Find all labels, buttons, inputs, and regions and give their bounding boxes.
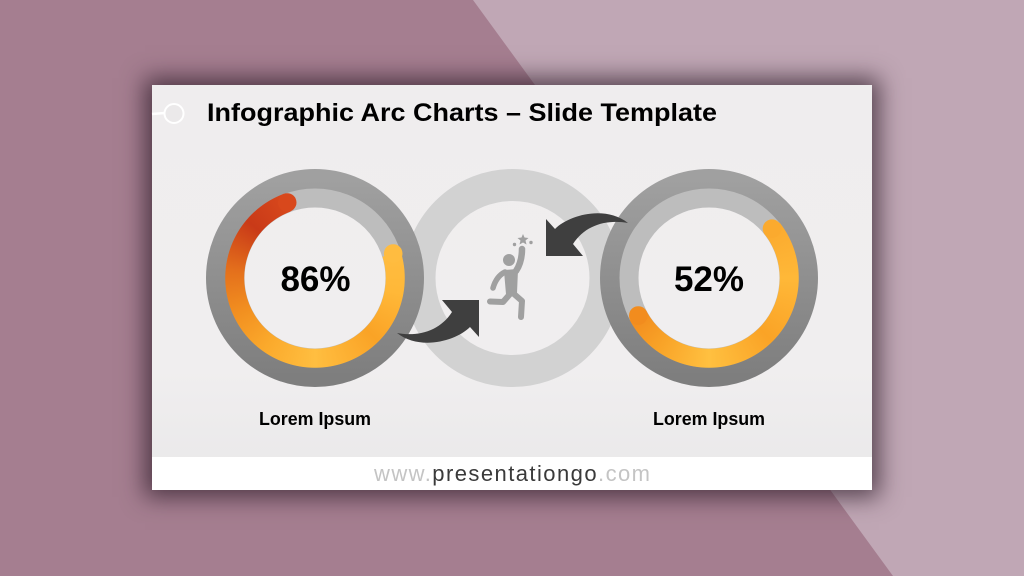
right gauge arc bbox=[630, 222, 799, 368]
slide panel bbox=[152, 85, 872, 490]
title: Infographic Arc Charts – Slide Template bbox=[207, 99, 717, 127]
left gauge value: 86% bbox=[280, 260, 350, 298]
left label: Lorem Ipsum bbox=[259, 409, 371, 429]
right gauge track bbox=[600, 169, 818, 387]
right gauge arc caps bbox=[629, 219, 780, 320]
left gauge track bbox=[206, 169, 424, 387]
footer url: www.presentationgo.com bbox=[373, 461, 650, 486]
left gauge: 86% bbox=[206, 169, 424, 387]
right gauge: 52% bbox=[600, 169, 818, 387]
left gauge arc caps bbox=[282, 193, 402, 256]
right gauge value: 52% bbox=[674, 260, 744, 298]
right label: Lorem Ipsum bbox=[653, 409, 765, 429]
left gauge arc bbox=[225, 194, 405, 368]
footer bar bbox=[152, 457, 872, 490]
